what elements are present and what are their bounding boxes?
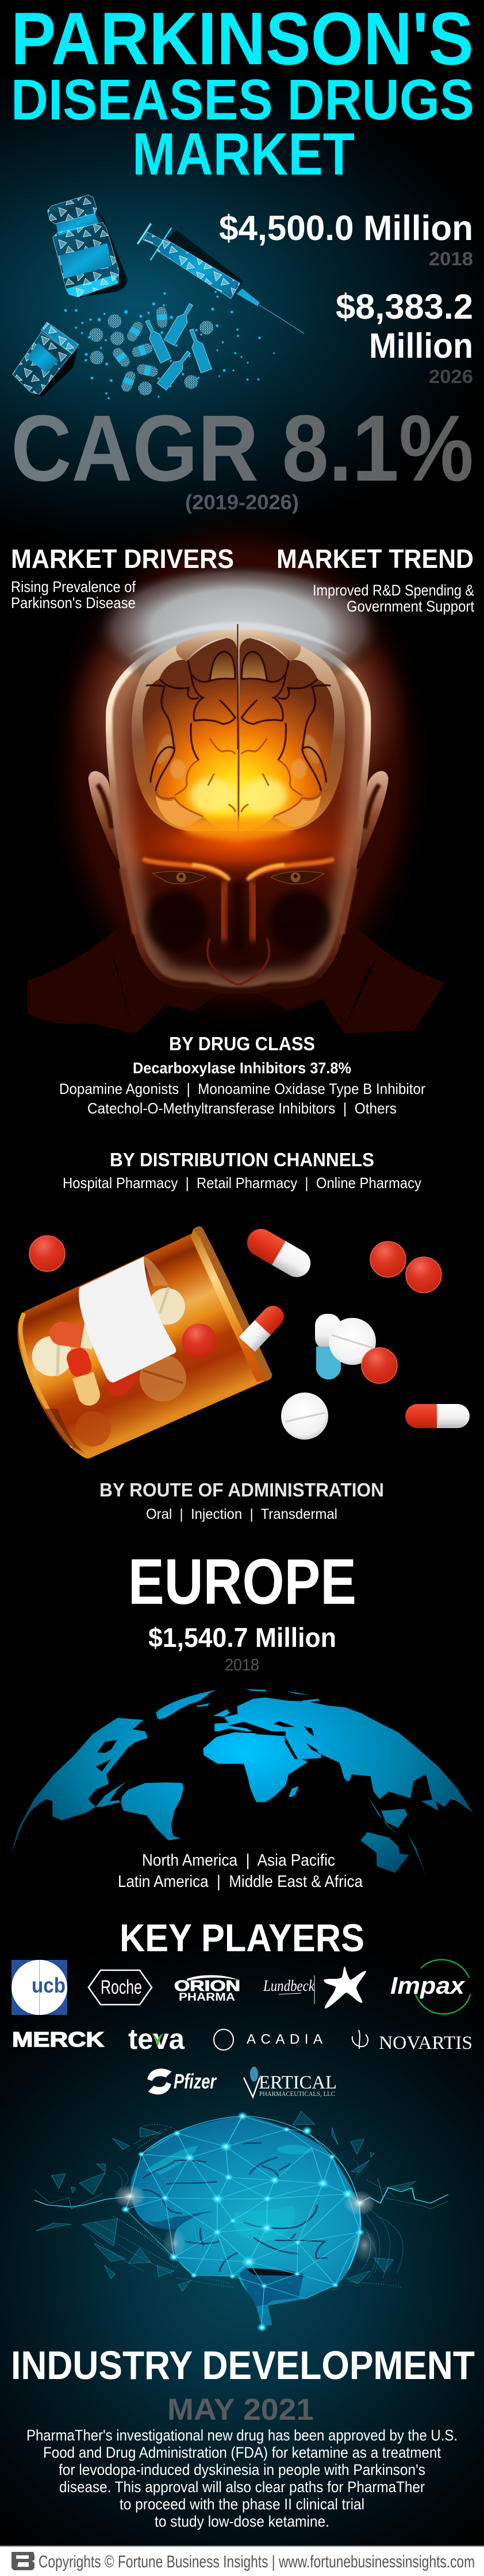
- bottle label: [79, 1256, 176, 1382]
- panel: market drivers: Parkinson's Disease: [11, 594, 136, 612]
- logo: Pfizer: [148, 2070, 217, 2094]
- paragraph: development description: [26, 2427, 458, 2530]
- logo: Impax: [390, 1952, 479, 2022]
- logo: Lundbeck: Lundbeck: [263, 1977, 315, 1994]
- icon: capsule leaving bottle: [239, 1301, 289, 1352]
- bottle mouth: [191, 1227, 272, 1381]
- icon: Fortune Business Insights logo: [11, 2552, 34, 2570]
- paragraph: development description: to proceed with the phase II clinical trial: [120, 2496, 364, 2513]
- logo: Roche: Roche: [101, 1977, 142, 1998]
- brain folds: [143, 2143, 328, 2272]
- glow below brain: [183, 818, 293, 840]
- logo: Novartis: NOVARTIS: [379, 2033, 473, 2053]
- icon: red balls: [29, 1236, 441, 1293]
- icon: round tablets: [89, 314, 213, 396]
- logo: Orion Pharma: [174, 1975, 240, 2003]
- nose: [208, 938, 269, 984]
- brain shading: [148, 2211, 304, 2307]
- logo: Pfizer: Pfizer: [174, 2070, 217, 2093]
- illustration: world globe: [11, 1689, 473, 1876]
- panel: by distribution channels: Hospital Pharmacy | Retail Pharmacy | Online Pharmacy: [63, 1174, 421, 1192]
- logo: Vertical Pharmaceuticals: PHARMACEUTICALS, LLC: [259, 2090, 335, 2098]
- panel: by drug class: Dopamine Agonists | Monoamine Oxidase Type B Inhibitor: [59, 1080, 425, 1097]
- footer: [0, 2546, 484, 2576]
- panel: by drug class: Decarboxylase Inhibitors 37.8%: [133, 1059, 351, 1077]
- panel: leading region: $1,540.7 Million: [148, 1622, 336, 1653]
- icon: upright vial: [48, 195, 128, 297]
- title: MARKET: [132, 121, 355, 188]
- head silhouette: [106, 625, 371, 994]
- skull highlight: [128, 622, 348, 656]
- paragraph: development description: disease. This approval will also clear paths for PharmaTher: [59, 2478, 425, 2496]
- panel: market drivers: MARKET DRIVERS: [11, 544, 234, 574]
- paragraph: development description: for levodopa-induced dyskinesia in people with Parkinson's: [59, 2461, 425, 2478]
- face shadows: [146, 881, 331, 952]
- seas: [95, 1721, 351, 1784]
- icon: orange bottle: [17, 1227, 272, 1459]
- illustration: vials, syringe and pills: [13, 195, 304, 400]
- icon: ampoules: [142, 301, 212, 390]
- logos: key players: [11, 1952, 479, 2098]
- logo: Novartis: [352, 2030, 473, 2053]
- face: brows, nose bridge and eyes: [122, 859, 355, 941]
- stat: CAGR: (2019-2026): [185, 490, 299, 514]
- icon: red and white capsule: [242, 1224, 316, 1282]
- panel: leading region: EUROPE: [128, 1546, 356, 1618]
- regions list: [118, 1851, 363, 1891]
- logo: Merck: MERCK: [12, 2028, 104, 2051]
- panel: by drug class: BY DRUG CLASS: [169, 1033, 315, 1054]
- stat: 2026 market size: $8,383.2: [336, 287, 473, 326]
- panel: leading region: [128, 1546, 356, 1674]
- stat: 2026 market size: Million: [369, 326, 473, 365]
- logo: Vertical Pharmaceuticals: [244, 2067, 337, 2098]
- panel: by distribution channels: BY DISTRIBUTION CHANNELS: [110, 1149, 374, 1170]
- panel: market trend: [276, 544, 474, 615]
- icon: capsules: [111, 307, 168, 393]
- logo: Acadia: ACADIA: [247, 2032, 322, 2047]
- icon: red ball: [362, 1348, 397, 1383]
- icon: horizontal capsule: [405, 1404, 470, 1428]
- ears: [89, 771, 389, 863]
- stat: 2018 market size: [219, 208, 473, 269]
- mesh lines: [125, 2116, 360, 2326]
- forehead glow: [128, 809, 348, 875]
- title: [11, 0, 474, 188]
- panel: market drivers: Rising Prevalence of: [11, 578, 136, 595]
- icon: white tablet: [281, 1393, 328, 1440]
- glows: [114, 2185, 378, 2262]
- logo: Orion Pharma: PHARMA: [179, 1991, 235, 2003]
- regions list: North America | Asia Pacific: [142, 1851, 335, 1870]
- mesh nodes: [121, 2111, 364, 2332]
- icon: white tablet: [329, 1318, 376, 1365]
- logo: Roche: [89, 1970, 152, 2005]
- logo: Vertical Pharmaceuticals: ERTICAL: [259, 2072, 337, 2093]
- date: May 2021: MAY 2021: [167, 2393, 314, 2427]
- pills inside bottle: [32, 1287, 217, 1446]
- heading: key players: KEY PLAYERS: [120, 1916, 364, 1960]
- logo: teva: teva: [128, 2023, 185, 2055]
- panel: leading region: 2018: [225, 1656, 259, 1674]
- glowing particles: [64, 291, 275, 400]
- panel: by route of administration: Oral | Injection | Transdermal: [146, 1506, 337, 1522]
- shoulders: [28, 919, 445, 1034]
- panel: by drug class: Catechol-O-Methyltransferase Inhibitors | Others: [87, 1100, 397, 1117]
- logo: Orion Pharma: ORION: [174, 1977, 240, 1994]
- panel: by drug class: [59, 1033, 425, 1117]
- logo: Acadia: [214, 2029, 322, 2050]
- panel: by route of administration: [99, 1479, 384, 1522]
- brain body: [130, 2116, 362, 2326]
- panel: by distribution channels: [63, 1149, 421, 1192]
- panel: by route of administration: BY ROUTE OF ADMINISTRATION: [99, 1479, 384, 1500]
- logo: Lundbeck: [263, 1966, 366, 2009]
- stat: 2018 market size: $4,500.0 Million: [219, 208, 473, 247]
- illustration: head with glowing brain: [28, 500, 445, 1039]
- stat: 2018 market size: 2018: [429, 248, 473, 269]
- icon: blue capsule: [315, 1314, 341, 1379]
- regions list: Latin America | Middle East & Africa: [118, 1873, 363, 1891]
- illustration: pill bottle with pills: [17, 1224, 470, 1459]
- panel: market trend: MARKET TREND: [276, 544, 474, 574]
- paragraph: development description: to study low-dose ketamine.: [155, 2513, 329, 2530]
- paragraph: development description: Food and Drug Administration (FDA) for ketamine as a treatment: [43, 2444, 441, 2461]
- icon: syringe: [137, 223, 304, 334]
- panel: market drivers: [11, 544, 234, 612]
- stat: 2026 market size: [336, 287, 473, 387]
- floating triangles: [36, 2111, 416, 2291]
- brain: [132, 624, 345, 831]
- lightning: [34, 2188, 448, 2207]
- illustration: network brain: [34, 2111, 448, 2332]
- logo: Impax: Impax: [390, 1972, 466, 1999]
- particle clusters: [84, 2125, 403, 2289]
- stat: 2026 market size: 2026: [429, 366, 473, 387]
- logo: ucb: ucb: [32, 1974, 66, 1997]
- icon: tipped vial: [13, 322, 79, 397]
- logo: ucb: [11, 1960, 67, 2015]
